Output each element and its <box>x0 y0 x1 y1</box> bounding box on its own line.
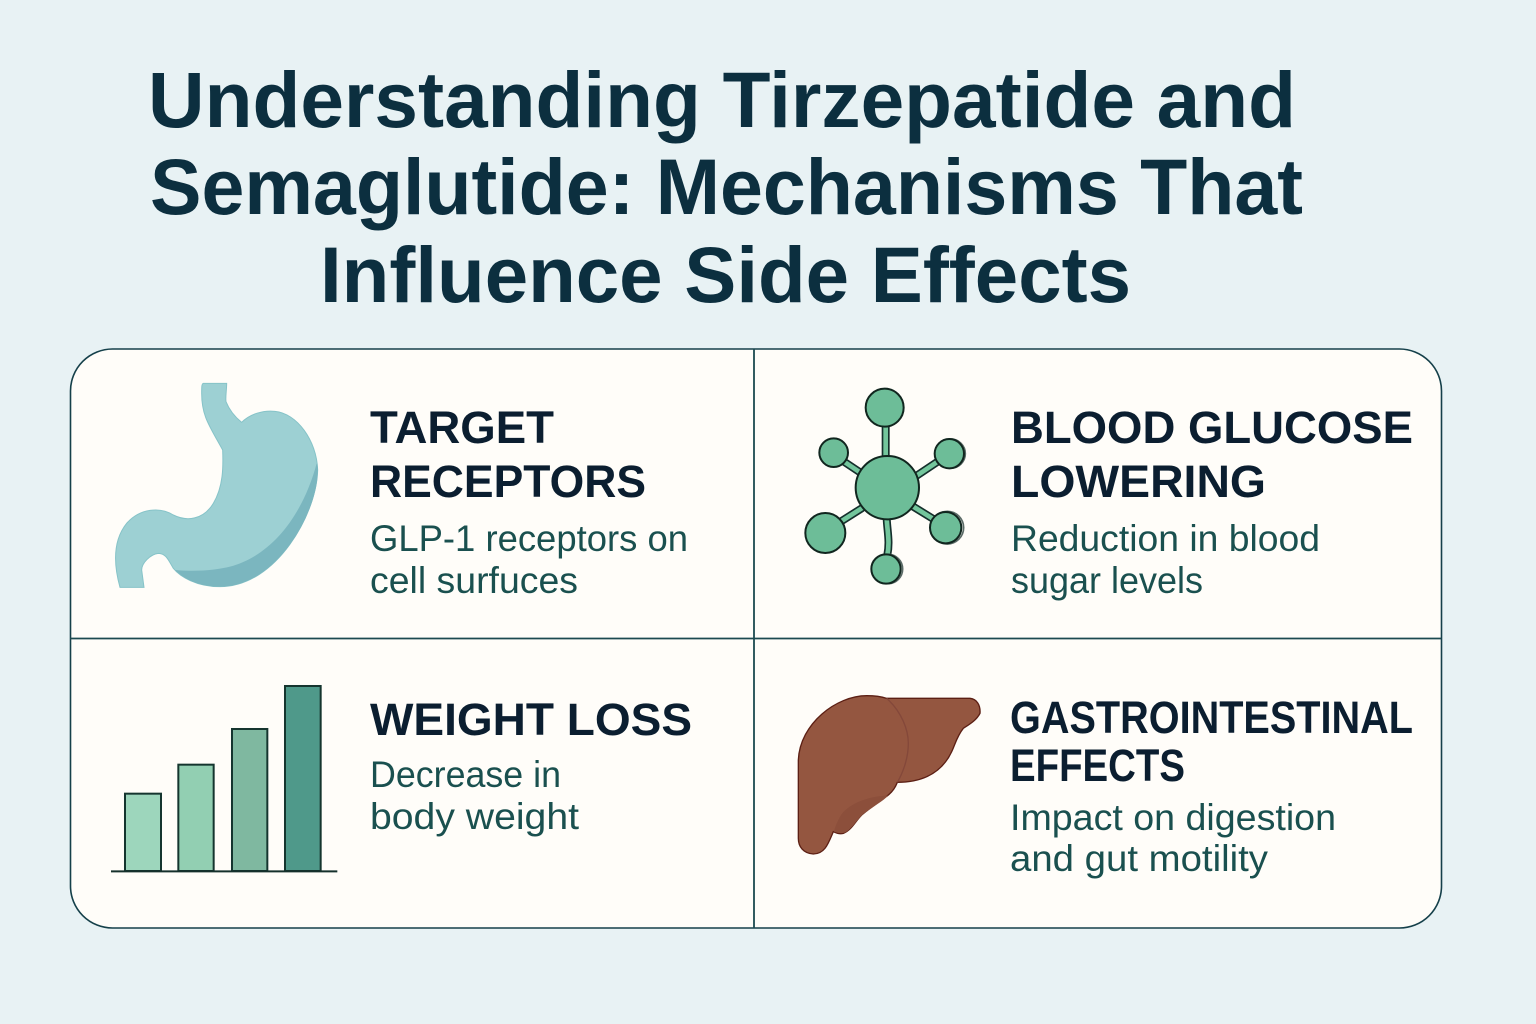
heading: blood glucose lowering: BLOOD GLUCOSE <box>1011 402 1413 453</box>
text: blood glucose description: Reduction in blood <box>1011 518 1320 559</box>
heading: target receptors: TARGET <box>370 402 554 453</box>
title <box>148 55 1303 319</box>
icon: liver <box>798 696 980 854</box>
panel: target receptors <box>116 383 688 601</box>
text: target receptors description: cell surfuces <box>370 560 578 601</box>
text: weight loss description: body weight <box>370 796 580 837</box>
heading: gastrointestinal effects <box>1010 692 1413 791</box>
heading: blood glucose lowering: LOWERING <box>1011 456 1266 507</box>
text: weight loss description: Decrease in <box>370 754 561 795</box>
panel: gastrointestinal effects <box>798 692 1413 879</box>
heading: target receptors <box>370 402 646 507</box>
text: gastrointestinal description: Impact on digestion <box>1010 797 1336 838</box>
icon: molecule <box>805 389 965 584</box>
text: blood glucose description: sugar levels <box>1011 560 1203 601</box>
text: gastrointestinal description: and gut motility <box>1010 838 1269 879</box>
title: Understanding Tirzepatide and <box>148 55 1296 144</box>
title: Influence Side Effects <box>320 230 1131 319</box>
heading: gastrointestinal effects: EFFECTS <box>1010 740 1185 791</box>
text: target receptors description <box>370 518 688 601</box>
bar chart icon <box>111 686 337 871</box>
gallbladder shadow <box>834 796 888 833</box>
text: target receptors description: GLP-1 receptors on <box>370 518 688 559</box>
liver lobe line <box>887 698 908 782</box>
icon: stomach <box>116 383 318 587</box>
panel: card grid <box>70 349 1442 928</box>
heading: weight loss: WEIGHT LOSS <box>370 694 692 745</box>
title: Semaglutide: Mechanisms That <box>150 142 1303 231</box>
stomach shading <box>175 463 318 587</box>
heading: target receptors: RECEPTORS <box>370 456 646 507</box>
text: weight loss description <box>370 754 580 837</box>
panel: weight loss <box>111 686 692 871</box>
text: blood glucose description <box>1011 518 1320 601</box>
heading: blood glucose lowering <box>1011 402 1413 507</box>
heading: gastrointestinal effects: GASTROINTESTINAL <box>1010 692 1413 743</box>
text: gastrointestinal description <box>1010 797 1336 879</box>
panel: blood glucose lowering <box>805 389 1413 601</box>
